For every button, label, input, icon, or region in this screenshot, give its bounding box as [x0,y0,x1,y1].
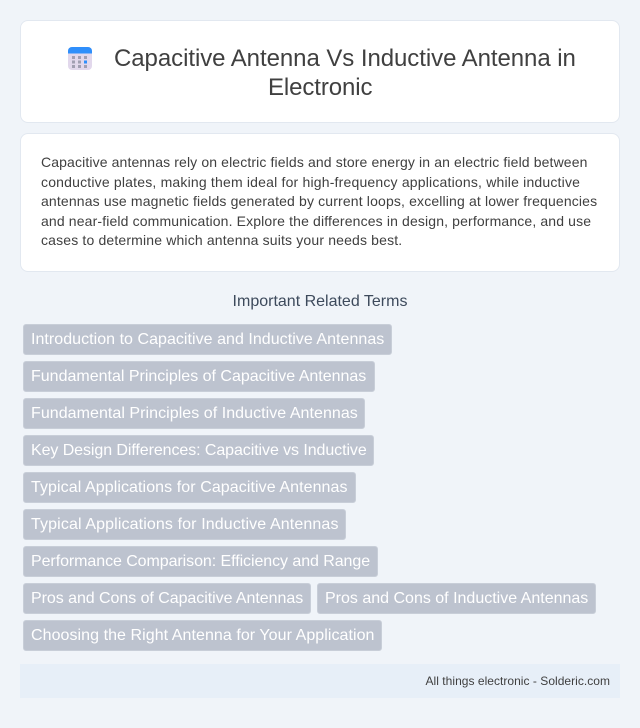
intro paragraph: conductive plates, making them ideal for high-frequency applications, while inductive [41,174,580,190]
tag [23,361,375,392]
intro paragraph: Capacitive antennas rely on electric fields and store energy in an electric field between [41,154,588,170]
intro paragraph [41,154,597,248]
tag: Key Design Differences: Capacitive vs Inductive [31,442,367,459]
footer [20,664,620,698]
panel: intro text [20,133,620,272]
tag [23,583,311,614]
tag: Typical Applications for Capacitive Antennas [31,479,348,496]
tag: Pros and Cons of Inductive Antennas [325,590,588,607]
tag [23,398,365,429]
title: Electronic [268,74,372,101]
tag: Fundamental Principles of Inductive Antennas [31,405,358,422]
panel: title card [20,20,620,123]
tag: Typical Applications for Inductive Antennas [31,516,339,533]
tag [23,509,346,540]
footer credit: All things electronic - Solderic.com [426,674,610,688]
tag: Choosing the Right Antenna for Your Application [31,627,375,644]
tag [23,546,378,577]
tag [23,324,392,355]
tag [23,472,356,503]
title [114,45,576,101]
title: Capacitive Antenna Vs Inductive Antenna in [114,45,576,72]
tag: Performance Comparison: Efficiency and Range [31,553,370,570]
tag: Fundamental Principles of Capacitive Antennas [31,368,366,385]
tag [23,620,382,651]
tag [23,435,374,466]
tag [317,583,596,614]
intro paragraph: and near-field communication. Explore the differences in design, performance, and use [41,213,591,229]
intro paragraph: antennas use magnetic fields generated by current loops, excelling at lower frequencies [41,193,597,209]
tag list [23,324,596,651]
tag: Pros and Cons of Capacitive Antennas [31,590,303,607]
icon: calendar [68,47,92,70]
tag: Introduction to Capacitive and Inductive Antennas [31,331,384,348]
heading: important related terms: Important Related Terms [233,293,407,310]
intro paragraph: cases to determine which antenna suits your needs best. [41,232,402,248]
